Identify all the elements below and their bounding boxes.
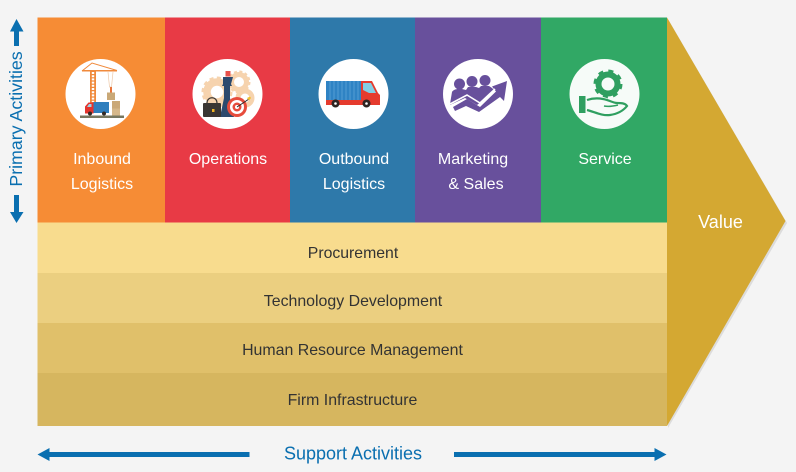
operations label: Operations <box>189 151 267 168</box>
panel: outbound logistics <box>290 18 415 222</box>
service label: Service <box>578 151 632 168</box>
band: human resource management <box>38 323 667 373</box>
outbound logistics label: Outbound <box>319 151 389 168</box>
panel: service <box>541 18 667 222</box>
band: human resource management: Human Resource Management <box>242 342 463 359</box>
arrow: primary up <box>10 19 24 46</box>
outbound logistics label: Logistics <box>323 176 385 193</box>
icon: hand holding gear <box>579 71 628 115</box>
inbound logistics label: Logistics <box>71 176 133 193</box>
icon: crane and truck <box>80 63 124 118</box>
band: firm infrastructure <box>38 373 667 426</box>
band: procurement: Procurement <box>308 245 399 262</box>
panel: inbound logistics <box>38 18 165 222</box>
band: technology development <box>38 273 667 323</box>
inbound logistics label: Inbound <box>73 151 131 168</box>
band: technology development: Technology Development <box>264 293 443 310</box>
icon: people with rising arrow <box>450 75 507 112</box>
arrow: support left <box>38 448 250 461</box>
marketing and sales label: Marketing <box>438 151 508 168</box>
panel: operations <box>165 18 290 222</box>
value label: Value <box>698 212 743 232</box>
icon: gears, chess piece, briefcase, target <box>203 71 252 117</box>
panel: marketing and sales <box>415 18 541 222</box>
icon: delivery truck <box>326 81 380 108</box>
band: procurement <box>38 222 667 273</box>
arrow: primary down <box>10 195 24 223</box>
support activities label: Support Activities <box>284 444 422 464</box>
marketing and sales label: & Sales <box>448 176 504 193</box>
primary activities label: Primary Activities <box>6 51 26 187</box>
band: firm infrastructure: Firm Infrastructure <box>288 392 418 409</box>
arrow: support right <box>454 448 666 461</box>
value chevron <box>667 18 787 428</box>
